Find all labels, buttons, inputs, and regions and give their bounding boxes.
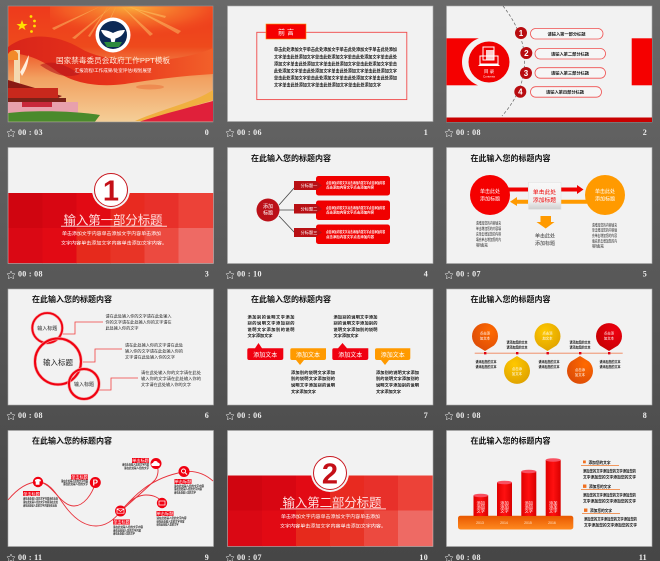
callout 2: 单击标题 <box>71 474 89 481</box>
branch 3: 点击添加内容文字点击添加内容 <box>326 234 375 239</box>
footer 8: 8 <box>643 411 647 420</box>
text block 3: 别的说明文字添加别的 <box>334 320 378 326</box>
bar 2015 <box>521 470 536 516</box>
text block 3: 添加别的说明文字添加 <box>334 314 378 320</box>
year labels: 2016 <box>548 521 556 525</box>
foreword body text: 单击此处添加文字单击此处添加文字单击此处添加文字单击此处添加 <box>274 74 397 82</box>
circle small top <box>32 313 62 343</box>
label 4: 添加文本 <box>381 351 405 359</box>
text 2: 输入你的文字请在此处输入你的 <box>125 348 183 354</box>
item 2: 2 <box>524 49 529 58</box>
icon: emblem logo <box>96 18 130 52</box>
tile band <box>228 476 433 546</box>
captions: 请添加您的文本 <box>600 364 621 369</box>
footer 3: 3 <box>205 270 209 278</box>
callout 6: 请在此处输入您的文字 <box>156 522 178 527</box>
callout 2: 请在此处输入您的文字 <box>63 481 88 486</box>
footer 6: 6 <box>205 411 209 420</box>
sun glow and rays <box>50 6 213 52</box>
callout 6 <box>156 510 186 527</box>
text 1: 此处输入你的文字 <box>106 324 138 332</box>
connectors <box>63 322 138 390</box>
bar 2015: 添加 <box>525 500 533 506</box>
bar chart <box>473 458 561 516</box>
left text: 请增加您的内容填充 <box>476 220 501 226</box>
footer 5 <box>445 270 647 279</box>
bar 2015: 添加 <box>525 504 533 510</box>
footer 9 <box>7 553 209 561</box>
label 3 <box>332 343 368 360</box>
footer 0: 00 : 03 <box>18 128 43 137</box>
footer 10 <box>226 553 428 561</box>
drop 5: 加文本 <box>604 336 615 340</box>
callout 3: 单击标题 <box>113 519 131 526</box>
green hedge <box>8 111 100 122</box>
item 3: 请输入第三部分标题 <box>551 70 590 76</box>
captions: 请添加您的文本 <box>570 340 591 344</box>
callout 4: 请在此处输入您的文字 <box>124 465 149 470</box>
drop 5: 点击添 <box>604 330 615 336</box>
branch 2: 分标题二 <box>301 206 317 212</box>
footer 1: 00 : 06 <box>237 128 262 137</box>
label 2 <box>290 348 326 365</box>
list item 3: 文字添加您的文字添加您的文字 <box>584 522 637 528</box>
bar 2013: 添加 <box>477 500 485 506</box>
captions <box>476 340 621 369</box>
list item 2 <box>581 483 636 504</box>
branch 3: 分标题三 <box>301 229 317 236</box>
red circle: 添加标题 <box>480 196 500 202</box>
bar 2013: 文字 <box>477 508 485 514</box>
footer 7: 00 : 06 <box>237 411 262 420</box>
item 1: 1 <box>519 29 524 38</box>
captions: 请添加您的文本 <box>476 364 497 369</box>
item 1: 请输入第一部分标题 <box>548 30 586 38</box>
contents badge: 目 录 <box>484 68 495 75</box>
left text: 容填充 <box>476 242 488 248</box>
circle small top: 输入标题 <box>37 325 57 332</box>
branch 2: 点击添加内容文字点击添加内容文字点击添加内容 <box>326 205 386 210</box>
heading: 在此输入您的标题内容 <box>32 436 112 446</box>
slide 2: contents <box>446 6 652 122</box>
item 4: 请输入第四部分标题 <box>546 88 585 96</box>
item 2 <box>520 47 606 59</box>
captions: 请添加您的文本 <box>476 359 497 364</box>
captions: 请添加您的文本 <box>506 340 528 344</box>
slide 4: tree diagram <box>228 148 433 264</box>
drop 3: 点击添 <box>542 330 553 336</box>
item 2: 请输入第二部分标题 <box>551 50 590 58</box>
contents badge <box>462 37 512 87</box>
branch 1 <box>294 176 390 196</box>
text block 4: 别的说明文字添加别的 <box>376 375 419 382</box>
right text: 请增加您的内容填充 <box>592 222 617 228</box>
drop 2: 加文本 <box>512 371 523 376</box>
left text: 单击增加您的内容填 <box>476 225 501 232</box>
center box <box>528 182 561 209</box>
footer 4 <box>226 270 428 279</box>
bar 2014: 文字 <box>500 508 509 514</box>
left red block <box>446 38 478 85</box>
text block 1 <box>248 314 294 339</box>
text 3: 输入你的文字请在此处输入你的 <box>141 375 201 382</box>
text 2 <box>125 342 184 360</box>
number badge: 1 <box>103 176 119 208</box>
node: cloud <box>150 458 162 469</box>
Tiananmen gate <box>8 50 78 113</box>
callout 4: 请在此处输入您的文字内容 <box>122 462 149 466</box>
list item 2: 添加您的文字添加您的文字添加您的 <box>583 492 636 498</box>
arrow: down <box>536 216 554 228</box>
bottom right ribbon <box>135 90 213 122</box>
list item 3: 添加您的文字添加您的文字添加您的 <box>584 516 637 522</box>
timeline axis <box>475 352 623 354</box>
section description <box>280 513 386 530</box>
bar 2016: 添加 <box>549 504 557 510</box>
bar 2014 <box>497 481 512 516</box>
section title: 输入第二部分标题 <box>282 495 382 510</box>
callout 6: 单击标题 <box>157 510 174 517</box>
red circle <box>470 175 510 215</box>
drop 1: 点击添 <box>480 330 491 336</box>
text 2: 请在此处输入你的文字请在此处 <box>125 342 184 348</box>
connector lines <box>279 187 295 233</box>
bar 2013: 添加 <box>477 504 485 510</box>
callout 4 <box>122 457 150 470</box>
right red block <box>632 38 652 85</box>
callout 3: 请在此处输入您的文字 <box>113 530 135 536</box>
footer 2: 2 <box>643 128 647 137</box>
list item 3: 添加您的文字 <box>590 507 612 514</box>
footer 8 <box>445 411 647 420</box>
foreword body text: 文字单击此处添加文字单击此处添加文字单击此处添加文字单击此处 <box>274 54 398 60</box>
list item 3 <box>582 507 637 528</box>
center caption: 单击此处 <box>535 232 555 240</box>
bar 2016: 文字 <box>549 508 557 514</box>
outlined text frame <box>257 32 407 100</box>
circle small bottom <box>69 369 99 399</box>
heading: 在此输入您的标题内容 <box>251 294 331 304</box>
footer 2 <box>445 128 647 137</box>
number badge: 2 <box>322 458 338 490</box>
center node: 添加 <box>263 203 273 210</box>
text block 4: 添加别的说明文字添加 <box>376 369 419 376</box>
orange base <box>458 516 573 530</box>
right text: 容填充 <box>592 242 604 250</box>
callout 6: 请在此处输入您的文字内容 <box>156 515 186 520</box>
foreword body text: 此处添加文字单击此处添加文字单击此处添加文字单击此处添加文字 <box>274 68 398 74</box>
foreword body text: 文字单击此处添加文字单击此处添加文字单击此处添加文字 <box>274 82 382 88</box>
callout 5 <box>174 478 204 494</box>
drop 3 <box>534 323 561 351</box>
branch 2 <box>294 200 390 220</box>
list item 1: 添加您的文字 <box>588 459 610 466</box>
text 1: 请在此处输入你的文字请在此处输入 <box>106 312 172 320</box>
center box: 添加标题 <box>533 196 556 204</box>
text 1 <box>106 312 172 332</box>
slide 5: exchange diagram <box>446 148 652 264</box>
callout 4: 单击标题 <box>132 457 150 464</box>
left text: 填充单击增加您的内 <box>476 236 501 243</box>
footer 11 <box>445 553 647 561</box>
text block 4: 说明文字添加别的说明 <box>376 382 419 388</box>
heading: 在此输入您的标题内容 <box>470 294 550 304</box>
footer 3: 00 : 08 <box>18 270 43 278</box>
callout 3: 请在此处输入您的文字内容 <box>113 524 143 529</box>
label 1: 添加文本 <box>253 351 277 359</box>
section description: 文字内容单击添加文字内容单击添加文字内容。 <box>61 240 167 246</box>
node: monitor <box>157 498 167 508</box>
item 3: 3 <box>524 69 529 78</box>
callout 1 <box>23 490 58 508</box>
slide 6: circles <box>8 289 214 405</box>
text block 2: 文字添加文字 <box>291 388 316 395</box>
callout 1: 请在此处输入您的文字内容请在此处 <box>23 499 58 504</box>
year labels: 2014 <box>500 521 508 525</box>
drop 2 <box>504 356 530 384</box>
right text <box>592 222 617 250</box>
year labels: 2013 <box>476 521 484 525</box>
text block 2: 说明文字添加别的说明 <box>291 382 335 388</box>
node: parking <box>90 477 101 488</box>
right text: 填充单击增加您的内 <box>592 238 617 244</box>
arrow: red to right <box>508 185 584 194</box>
tab: foreword heading <box>266 24 306 39</box>
footer 4: 4 <box>424 270 428 278</box>
label 2: 添加文本 <box>296 351 320 359</box>
callout 2: 请在此处输入您的文字内容 <box>61 478 88 483</box>
text 2: 文字请在此处输入你的文字 <box>125 354 175 360</box>
list item 2: 文字添加您的文字添加您的文字 <box>583 498 636 504</box>
left text <box>476 220 501 248</box>
contents badge: Contents <box>483 74 495 78</box>
text 3: 请在此处输入你的文字请在此处 <box>141 369 202 376</box>
slide 3: section one <box>8 148 214 264</box>
foreword body text: 单击此处添加文字单击此处添加文字单击此处添加文字单击此处添加 <box>274 46 397 53</box>
orange circle: 单击此处 <box>595 188 615 195</box>
branch 1: 点击添加内容文字点击添加内容 <box>326 184 375 190</box>
slide 0: cover <box>8 6 213 122</box>
heading: 在此输入您的标题内容 <box>32 294 112 304</box>
section description: 单击添加文字内容单击添加文字内容单击添加 <box>62 230 161 237</box>
text 3: 文字请在此处输入你的文字 <box>141 381 191 388</box>
text 3 <box>141 369 202 388</box>
bar 2016: 添加 <box>549 500 557 506</box>
heading: 在此输入您的标题内容 <box>470 436 550 446</box>
bottom bar <box>446 118 652 122</box>
curves <box>8 465 213 526</box>
callout 6: 请在此处输入您的文字内容 <box>156 518 184 524</box>
drop 4 <box>567 356 593 384</box>
orange circle: 添加标题 <box>595 196 615 202</box>
footer 7: 7 <box>424 411 428 420</box>
footer 1 <box>226 128 428 137</box>
circle large: 输入标题 <box>43 357 73 367</box>
right text: 单击增加您的内容填 <box>592 226 617 234</box>
branch 1: 点击添加内容文字点击添加内容文字点击添加内容 <box>326 180 386 185</box>
text block 3: 文字添加文字 <box>334 332 358 339</box>
callout 1: 单击标题 <box>23 490 41 497</box>
list item 1 <box>581 459 636 480</box>
drop 2: 点击添 <box>512 366 523 371</box>
foreword body text: 添加文字单击此处添加文字单击此处添加文字单击此处添加文字单击 <box>274 60 398 68</box>
footer 0: 0 <box>205 128 209 137</box>
drop 4: 点击添 <box>575 367 586 372</box>
text block 4 <box>376 369 419 395</box>
slide 7: four labels <box>228 289 433 405</box>
section description: 文字内容单击添加文字内容单击添加文字内容。 <box>280 522 386 530</box>
slide 11: bar chart <box>446 430 652 546</box>
arrow: orange to left <box>510 197 587 206</box>
branch 3: 点击添加内容文字点击添加内容文字点击添加内容 <box>326 229 386 234</box>
bar 2014: 添加 <box>500 504 509 510</box>
footer 6: 00 : 08 <box>18 411 43 420</box>
drop 5 <box>596 323 622 351</box>
tab: foreword heading: 前 言 <box>278 28 294 36</box>
footer 3 <box>7 270 209 279</box>
callout 1: 请在此处输入您的文字内容请在此处 <box>23 496 58 500</box>
callout 1: 请在此处输入您的文字内容请在此处 <box>23 502 57 508</box>
label 3: 添加文本 <box>338 351 362 359</box>
item 3 <box>520 67 606 79</box>
text block 2: 添加别的说明文字添加 <box>291 369 335 376</box>
text block 2 <box>291 369 335 395</box>
item 4 <box>514 86 602 98</box>
list item 2: 添加您的文字 <box>589 483 611 490</box>
text block 1: 添加别的说明文字添加 <box>248 314 294 320</box>
bar 2015: 文字 <box>525 508 533 514</box>
section title: 输入第一部分标题 <box>64 212 163 228</box>
captions: 请添加您的文本 <box>538 364 560 369</box>
red flag wave <box>8 36 213 85</box>
callout 3: 请在此处输入您的文字内容 <box>113 528 141 532</box>
right text: 充单击增加您的内容 <box>592 232 617 239</box>
text block 3: 说明文字添加别的说明 <box>334 326 378 333</box>
center node <box>256 198 280 222</box>
node: search <box>178 466 190 477</box>
callout 2 <box>61 474 89 486</box>
cover subtitle: 汇报流程/工作成果/处室评估/规划展望 <box>74 67 152 74</box>
footer 7 <box>226 411 428 420</box>
circle small bottom: 输入标题 <box>74 381 94 388</box>
list item 1: 文字添加您的文字添加您的文字 <box>583 474 636 480</box>
text 1: 你的文字请在此处输入你的文字请在 <box>106 318 172 326</box>
text block 1: 文字添加文字 <box>248 332 272 339</box>
captions: 请添加您的文本 <box>506 344 528 350</box>
icon: flag stars <box>16 15 36 33</box>
slide 10: section two <box>228 430 433 546</box>
tile band <box>8 193 213 263</box>
orange circle <box>585 175 625 215</box>
item 1 <box>515 27 603 39</box>
slide 8: timeline <box>446 289 652 405</box>
label 4 <box>375 348 410 365</box>
node: envelope <box>115 506 126 516</box>
drop 1 <box>472 323 498 351</box>
branch 3 <box>294 224 390 244</box>
slide 9: curve path <box>8 430 214 546</box>
footer 5: 5 <box>643 270 647 278</box>
branch 1: 分标题一 <box>301 182 317 189</box>
center caption: 添加标题 <box>535 240 555 247</box>
number badge <box>92 171 130 209</box>
captions: 请添加您的文本 <box>570 344 591 350</box>
year labels <box>476 521 556 525</box>
node: parking: P <box>93 478 99 488</box>
drop 4: 加文本 <box>575 372 586 377</box>
footer 1: 1 <box>424 128 428 137</box>
circle large <box>35 338 81 384</box>
text block 3 <box>334 314 378 339</box>
bar 2016 <box>546 458 561 516</box>
callout 5: 单击标题 <box>175 478 192 485</box>
branch 2: 点击添加内容文字点击添加内容 <box>326 210 375 214</box>
drop 3: 加文本 <box>542 336 553 340</box>
bar 2014: 添加 <box>500 500 509 506</box>
center caption <box>535 232 555 247</box>
red circle: 单击此处 <box>480 188 500 195</box>
cover title: 国家禁毒委员会政府工作PPT模板 <box>56 55 170 65</box>
callout 5: 请在此处输入您的文字 <box>174 490 196 494</box>
slide 1: foreword <box>228 6 433 122</box>
text block 1: 别的说明文字添加别的 <box>248 320 294 326</box>
foreword body text <box>274 46 398 88</box>
center box: 单击此处 <box>533 188 556 196</box>
node: shirt <box>33 477 43 487</box>
captions: 请添加您的文本 <box>600 359 621 364</box>
text block 2: 别的说明文字添加别的 <box>291 375 335 382</box>
section description <box>61 230 167 246</box>
drop 1: 加文本 <box>480 336 491 340</box>
footer 6 <box>7 411 209 420</box>
text block 4: 文字添加文字 <box>376 388 401 395</box>
footer 0 <box>7 128 209 137</box>
heading: 在此输入您的标题内容 <box>470 153 550 163</box>
heading: 在此输入您的标题内容 <box>251 153 331 163</box>
year labels: 2015 <box>524 521 532 525</box>
footer 2: 00 : 08 <box>456 128 481 137</box>
footer 4: 00 : 10 <box>237 270 262 278</box>
footer 8: 00 : 08 <box>456 411 481 420</box>
callout 5: 请在此处输入您的文字内容 <box>174 486 202 491</box>
center node: 标题 <box>263 210 273 216</box>
list item 1: 添加您的文字添加您的文字添加您的 <box>583 468 636 474</box>
captions: 请添加您的文本 <box>538 359 560 364</box>
footer 5: 00 : 07 <box>456 270 481 278</box>
faint red smudge <box>136 84 164 90</box>
bar 2013 <box>473 494 488 516</box>
number badge <box>311 454 349 492</box>
item 4: 4 <box>518 88 523 97</box>
section description: 单击添加文字内容单击添加文字内容单击添加 <box>281 513 380 520</box>
callout 3 <box>113 519 143 536</box>
left text: 充单击增加您的内容 <box>476 230 501 238</box>
callout 5: 请在此处输入您的文字内容 <box>174 483 204 488</box>
text block 1: 说明文字添加别的说明 <box>248 326 294 333</box>
dashed arc <box>502 6 525 116</box>
label 1 <box>247 343 283 360</box>
